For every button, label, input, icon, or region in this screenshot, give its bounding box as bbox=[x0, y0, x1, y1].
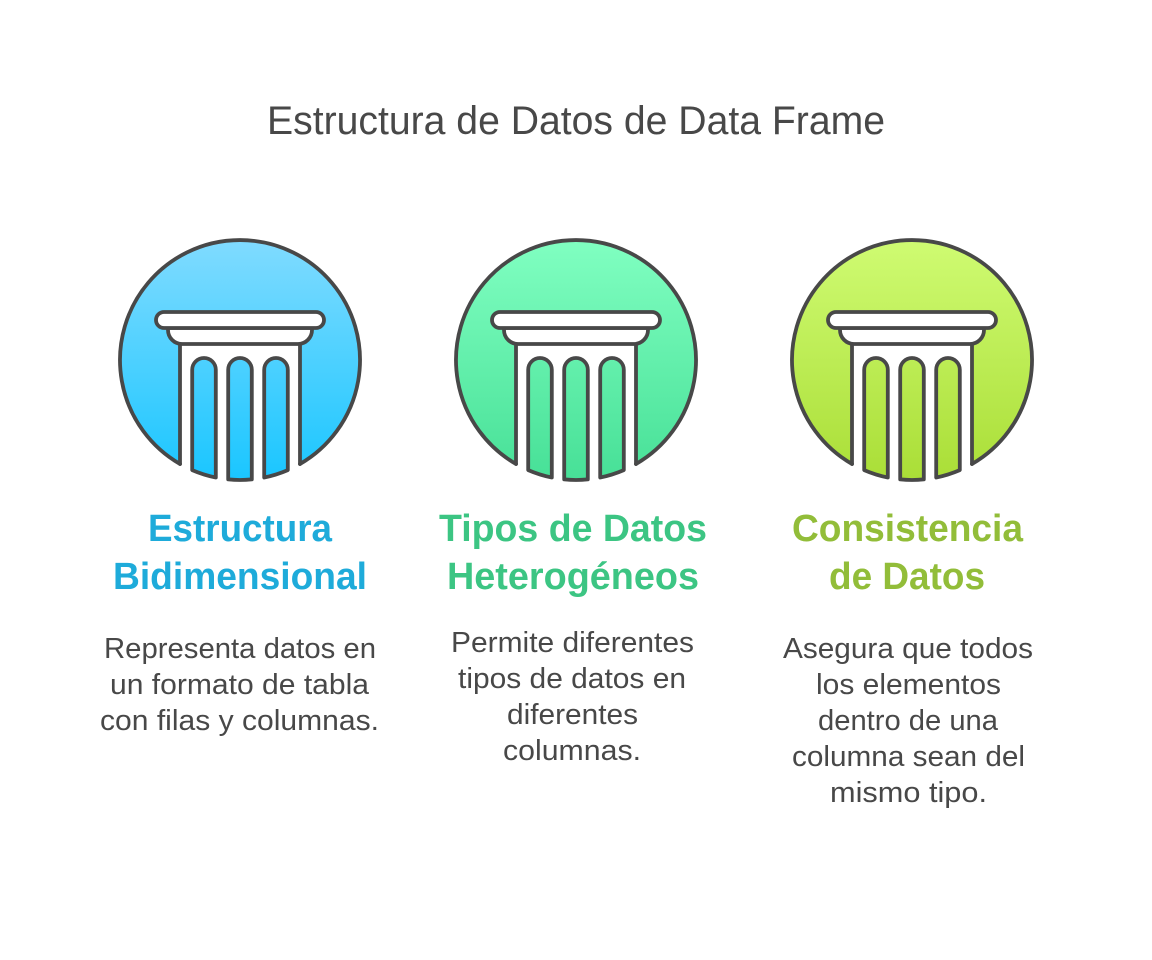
heading: consistencia de datos: Consistencia bbox=[792, 508, 1024, 550]
icon: green pillar circle bbox=[456, 240, 696, 480]
panel: consistencia de datos bbox=[783, 240, 1033, 809]
heading: consistencia de datos bbox=[792, 508, 1024, 598]
heading: tipos de datos heterogeneos bbox=[439, 508, 707, 598]
text: tipos de datos description bbox=[451, 627, 694, 767]
text: estructura bidimensional description: Representa datos en bbox=[104, 633, 376, 665]
text: estructura bidimensional description bbox=[100, 633, 379, 737]
text: tipos de datos description: columnas. bbox=[503, 735, 641, 767]
text: estructura bidimensional description: con filas y columnas. bbox=[100, 705, 379, 737]
icon: blue pillar circle bbox=[120, 240, 360, 480]
text: consistencia description: columna sean del bbox=[792, 741, 1025, 773]
text: consistencia description: dentro de una bbox=[818, 705, 999, 737]
heading: estructura bidimensional: Estructura bbox=[148, 508, 333, 550]
heading: consistencia de datos: de Datos bbox=[829, 556, 985, 598]
icon: lime pillar circle bbox=[792, 240, 1032, 480]
heading: tipos de datos heterogeneos: Heterogéneos bbox=[447, 556, 699, 598]
panel: tipos de datos heterogeneos bbox=[439, 240, 707, 767]
heading: tipos de datos heterogeneos: Tipos de Datos bbox=[439, 508, 707, 550]
text: tipos de datos description: tipos de datos en bbox=[458, 663, 686, 695]
text: consistencia description: Asegura que todos bbox=[783, 633, 1033, 665]
text: tipos de datos description: Permite diferentes bbox=[451, 627, 694, 659]
panel: estructura bidimensional bbox=[100, 240, 379, 737]
text: consistencia description: mismo tipo. bbox=[830, 777, 987, 809]
text: consistencia description: los elementos bbox=[816, 669, 1001, 701]
heading: estructura bidimensional bbox=[113, 508, 367, 598]
text: tipos de datos description: diferentes bbox=[507, 699, 638, 731]
text: consistencia description bbox=[783, 633, 1033, 809]
title: Estructura de Datos de Data Frame bbox=[267, 99, 885, 143]
text: estructura bidimensional description: un formato de tabla bbox=[110, 669, 370, 701]
heading: estructura bidimensional: Bidimensional bbox=[113, 556, 367, 598]
